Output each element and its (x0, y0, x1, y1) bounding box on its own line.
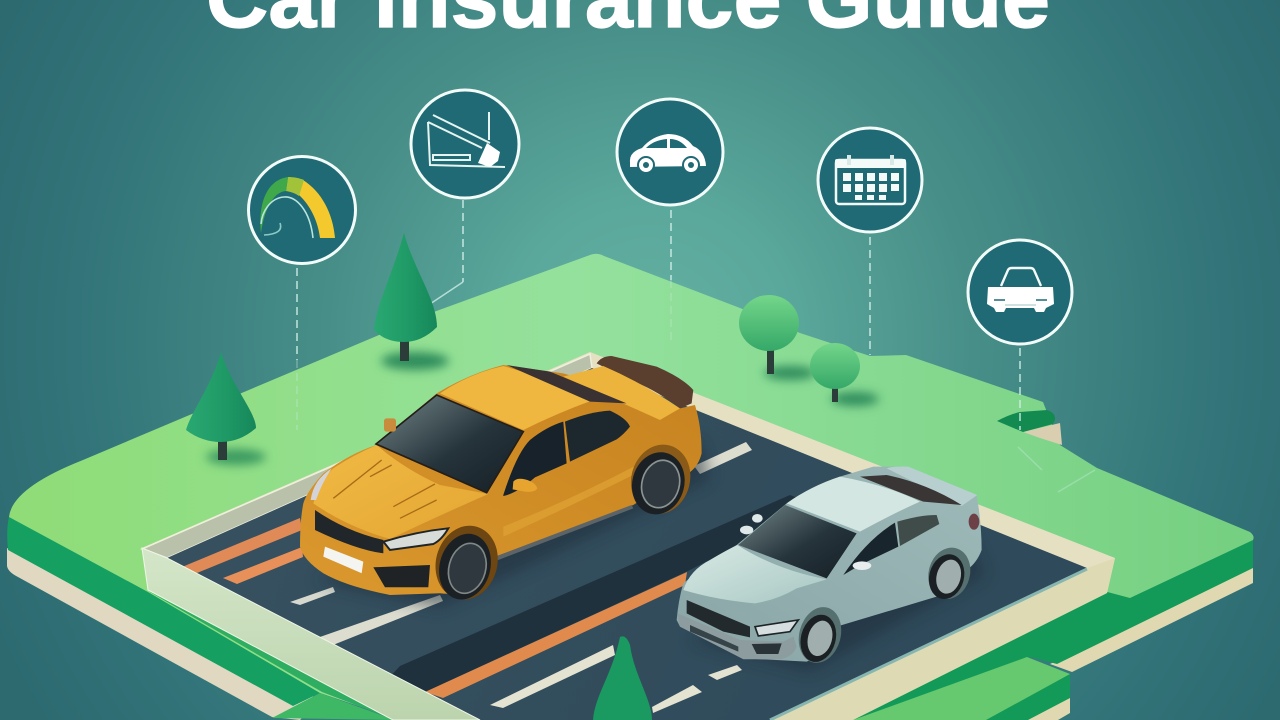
far headlight (311, 468, 332, 500)
grille (315, 510, 383, 553)
strip under lip (148, 590, 395, 720)
frame lower-right lip (770, 558, 1115, 720)
icon: calendar (818, 128, 922, 232)
lower bumper (677, 613, 797, 659)
headlight (383, 528, 448, 550)
bottom-left green piece (272, 693, 395, 720)
hood creases (333, 460, 437, 518)
right cream edge (1050, 566, 1253, 672)
grille (687, 600, 750, 637)
rear window strip (507, 365, 627, 403)
rear wheel (923, 543, 976, 604)
windshield (376, 395, 523, 493)
lip edge highlight (770, 569, 1087, 720)
hood (313, 445, 488, 539)
land tab right (997, 410, 1062, 445)
lower vent (752, 643, 782, 654)
plate (323, 547, 363, 573)
car shadows (315, 440, 985, 672)
roof (440, 366, 593, 430)
door highlight (503, 465, 637, 537)
rear wheel (623, 438, 698, 521)
side window (843, 523, 898, 575)
front wheel (427, 519, 506, 607)
headlight (755, 620, 798, 636)
tree: cone back (374, 233, 449, 370)
road surface (167, 368, 1087, 720)
sill trim (495, 505, 633, 561)
tree: cone left (186, 352, 266, 465)
land top surface (9, 254, 1254, 720)
land tab bottom right (853, 657, 1070, 720)
icon: gauge (248, 156, 356, 264)
silver car body (677, 467, 982, 662)
connector lines (297, 200, 1095, 492)
roof (787, 477, 920, 532)
far mirror (384, 418, 396, 432)
yellow car (300, 356, 702, 607)
road frame (142, 352, 1115, 720)
lower vent (373, 565, 430, 587)
rear side window (897, 515, 939, 546)
front wheel (793, 602, 847, 668)
icon: side car (617, 99, 723, 205)
rear deck (887, 467, 977, 506)
side window (503, 422, 567, 496)
windshield (738, 505, 857, 578)
silver car (677, 467, 982, 668)
icon: car crash (411, 90, 519, 198)
frame lower-left lip (142, 548, 480, 720)
right green edge (850, 538, 1253, 720)
tree: round large (739, 295, 816, 380)
far mirrors (740, 514, 763, 534)
rear side window (565, 411, 630, 462)
tree: round small (810, 343, 879, 406)
yellow car body (300, 365, 702, 595)
road markings (182, 442, 815, 713)
dark lane strip (385, 495, 815, 692)
tail light (969, 514, 979, 530)
mirror (853, 561, 871, 570)
left green edge (7, 517, 322, 706)
mirror (513, 479, 537, 492)
bumper slot (690, 625, 738, 652)
left cream edge (7, 548, 320, 720)
frame left inner wall (142, 354, 592, 558)
tree: cone foreground (593, 636, 652, 720)
rear deck (563, 366, 680, 420)
spoiler (597, 356, 693, 408)
icon: front car (968, 240, 1072, 344)
platform: landscape base (7, 254, 1254, 720)
rear glass (860, 475, 962, 505)
hood (683, 545, 827, 603)
